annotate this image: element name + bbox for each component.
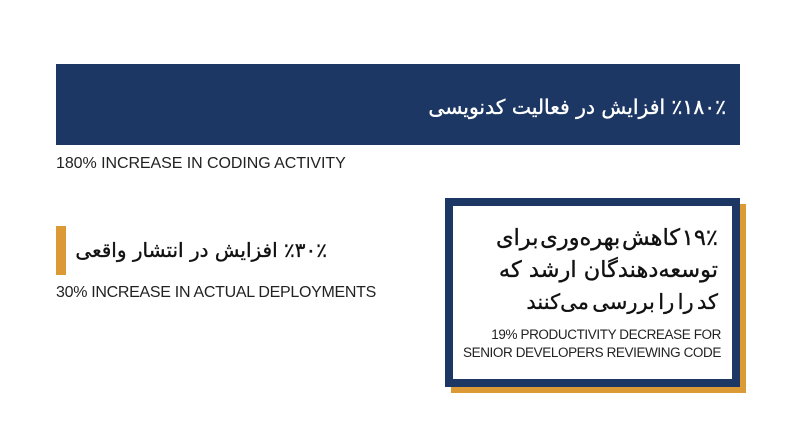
panel: 30% stat [56,226,376,301]
text: 30% English caption: 30% INCREASE IN ACTUAL DEPLOYMENTS [56,284,376,301]
heading: 30% increase Persian: ٪۳۰٪ افزایش در انتشار واقعی [75,238,327,262]
text: 19% English caption: 19% PRODUCTIVITY DECREASE FOR [491,327,721,342]
text: 180% English caption: 180% INCREASE IN CODING ACTIVITY [56,155,346,172]
heading: 180% increase Persian: ٪۱۸۰٪ افزایش در فعالیت کدنویسی [428,95,726,119]
accent bar [56,226,66,275]
panel: 19% callout [445,198,746,393]
orange offset shadow [451,204,746,393]
heading: 19% decrease Persian [496,225,718,314]
heading: 19% decrease Persian: توسعه‌دهندگان ارشد که [499,257,718,283]
text: 19% English caption [463,327,721,360]
navy framed card [445,198,740,387]
heading: 19% decrease Persian: ۱۹٪ کاهش بهره‌وری برای [496,225,718,251]
text: 19% English caption: SENIOR DEVELOPERS REVIEWING CODE [463,345,721,360]
heading: 19% decrease Persian: کد را را بررسی می‌کنند [526,290,718,314]
panel: 180% banner [56,64,740,145]
